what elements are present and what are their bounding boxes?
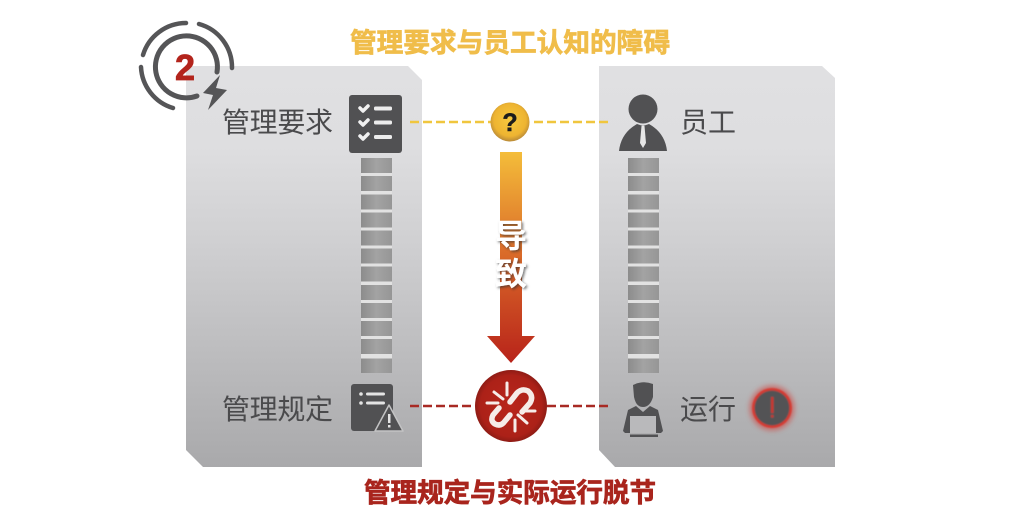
arrow label: 导 [495,218,527,254]
icon: alert [749,385,795,431]
label: management regulations: 管理规定 [222,394,333,425]
label: employee: 员工 [680,107,736,138]
ladder: right column [628,158,659,373]
icon: worker at laptop [623,382,663,437]
icon: question mark: ? [502,109,518,137]
label: operation: 运行 [680,394,736,425]
panel: right [599,66,835,467]
label: management requirements: 管理要求 [222,107,333,138]
icon: checklist [349,95,402,153]
icon: numbered badge 2: 2 [175,47,195,88]
icon: question mark [490,102,530,142]
icon: employee [619,94,667,151]
arrow: leads to [487,152,535,363]
ladder: left column [361,158,392,373]
icon: broken link [475,370,547,442]
connector: red dashed line [410,405,611,407]
arrow label: 致 [495,256,527,292]
icon: document with warning [351,384,403,431]
title: 管理要求与员工认知的障碍 [350,28,670,58]
arrow label [495,218,527,292]
panel: left [186,66,422,467]
caption: 管理规定与实际运行脱节 [364,478,656,508]
connector: yellow dashed line [410,121,611,123]
icon: numbered badge 2 [141,23,232,110]
